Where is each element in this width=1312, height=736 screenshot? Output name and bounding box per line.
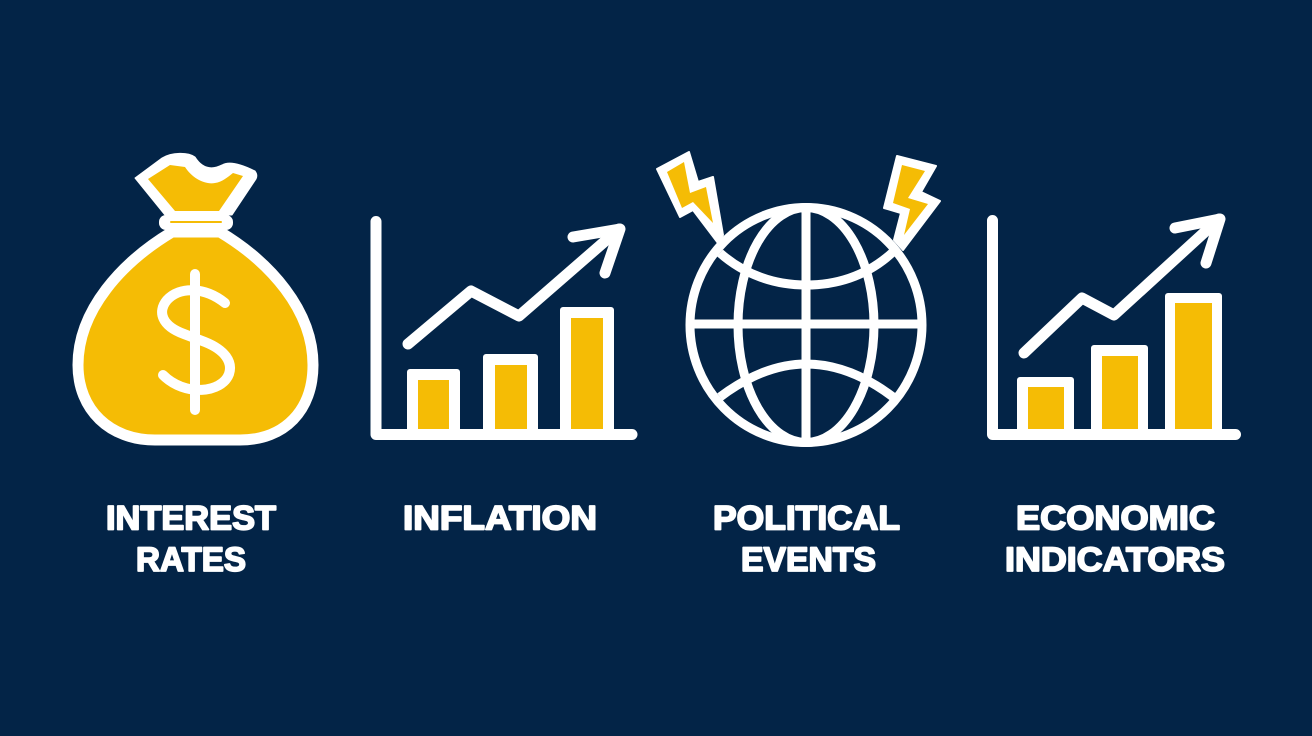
label: interest rates — [106, 500, 276, 579]
panel: political events — [657, 152, 940, 579]
label: political events: EVENTS — [741, 541, 876, 579]
chart icon: economic indicators bars and arrow — [992, 219, 1236, 435]
label: interest rates: INTEREST — [106, 500, 276, 538]
label: political events: POLITICAL — [713, 500, 900, 538]
panel: interest rates — [78, 153, 313, 579]
panel: inflation — [376, 222, 632, 538]
label: economic indicators: ECONOMIC — [1016, 500, 1215, 538]
label: interest rates: RATES — [136, 541, 246, 579]
label: political events — [713, 500, 900, 579]
label: economic indicators: INDICATORS — [1005, 541, 1225, 579]
panel: economic indicators — [992, 219, 1236, 579]
icon: globe with lightning bolts — [657, 152, 940, 442]
label: economic indicators — [1005, 500, 1225, 579]
icon: money bag — [78, 153, 313, 440]
label: inflation: INFLATION — [403, 500, 597, 538]
chart icon: inflation bars and arrow — [376, 222, 632, 435]
